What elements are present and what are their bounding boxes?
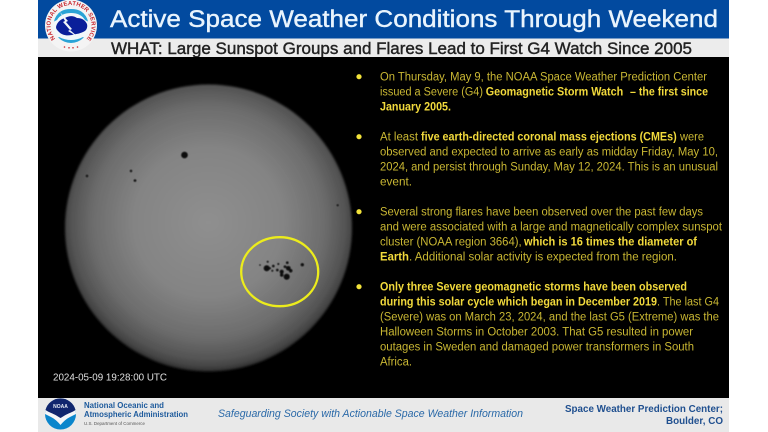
text block: bullet 1 xyxy=(356,72,708,114)
text block: bullet 2 xyxy=(356,132,718,189)
sunspot cluster: region 3664 xyxy=(259,261,304,280)
organization name: National Oceanic and xyxy=(84,400,164,410)
sunspots xyxy=(86,152,339,206)
text block: bullet 2: five earth-directed coronal mass ejections (CMEs) xyxy=(421,132,677,144)
text block: bullet 3 xyxy=(356,207,723,264)
tagline: Safeguarding Society with Actionable Space Weather Information xyxy=(218,408,523,420)
organization name xyxy=(84,400,188,427)
text block: bullet 4: Africa. xyxy=(380,357,412,369)
solar disk xyxy=(65,84,352,372)
text block: bullet 3: cluster (NOAA region 3664), xyxy=(380,237,522,249)
text block: bullet 3: Earth xyxy=(380,252,409,264)
callout: yellow ring around sunspot cluster xyxy=(241,237,318,306)
text block: bullet 4: Only three Severe geomagnetic storms have been observed xyxy=(380,282,687,294)
center name and location: Space Weather Prediction Center; xyxy=(565,403,723,415)
icon: NOAA logo: NOAA xyxy=(53,404,68,410)
organization name: U.S. Department of Commerce xyxy=(84,421,145,427)
center name and location xyxy=(565,403,723,427)
text block: bullet 4: during this solar cycle which began in December 2019 xyxy=(380,297,657,309)
text block: bullet 4: Halloween Storms in October 2003. That G5 resulted in power xyxy=(380,327,693,339)
text block: bullet 2: event. xyxy=(380,177,412,189)
text block: bullet 1: issued a Severe (G4) xyxy=(380,87,483,99)
text block: bullet 1: On Thursday, May 9, the NOAA Space Weather Prediction Center xyxy=(380,72,707,84)
icon: NOAA logo xyxy=(45,398,76,430)
text block: bullet 4: (Severe) was on March 23, 2024, and the last G5 (Extreme) was the xyxy=(380,312,719,324)
title: Active Space Weather Conditions Through Weekend xyxy=(110,6,718,33)
subtitle: WHAT: Large Sunspot Groups and Flares Lead to First G4 Watch Since 2005 xyxy=(111,40,692,58)
text block: bullet 1: January 2005. xyxy=(380,102,451,114)
text block: bullet 2: 2024, and persist through Sunday, May 12, 2024. This is an unusual xyxy=(380,162,718,174)
logo inner disc xyxy=(54,9,88,43)
text block: bullet 2: observed and expected to arrive as early as midday Friday, May 10, xyxy=(380,147,718,159)
text block: bullet 3: Several strong flares have been observed over the past few days xyxy=(380,207,703,219)
text block: bullet 3: and were associated with a large and magnetically complex sunspot xyxy=(380,222,723,234)
text block: bullet 4: . The last G4 xyxy=(657,297,720,309)
text block: bullet 3: which is 16 times the diameter of xyxy=(523,237,697,249)
image panel: solar disk background xyxy=(38,57,729,398)
text block: bullet 1: Geomagnetic Storm Watch xyxy=(486,87,623,99)
text block: bullet 3: . Additional solar activity is expected from the region. xyxy=(409,252,677,264)
subtitle band xyxy=(38,38,729,58)
text block: bullet 4: outages in Sweden and damaged power transformers in South xyxy=(380,342,694,354)
header band xyxy=(38,0,729,38)
footer band xyxy=(38,398,729,432)
text block: bullet 2: were xyxy=(679,132,704,144)
text block: bullet 4 xyxy=(356,282,720,369)
text block: bullet 2: At least xyxy=(380,132,419,144)
timestamp: 2024-05-09 19:28:00 UTC xyxy=(53,372,167,384)
center name and location: Boulder, CO xyxy=(666,415,723,427)
logo ring text: NATIONAL WEATHER SERVICE xyxy=(46,1,96,42)
text block: bullet 1: – the first since xyxy=(630,87,708,99)
organization name: Atmospheric Administration xyxy=(84,409,188,419)
icon: National Weather Service logo xyxy=(45,0,97,49)
logo stars xyxy=(64,46,78,49)
